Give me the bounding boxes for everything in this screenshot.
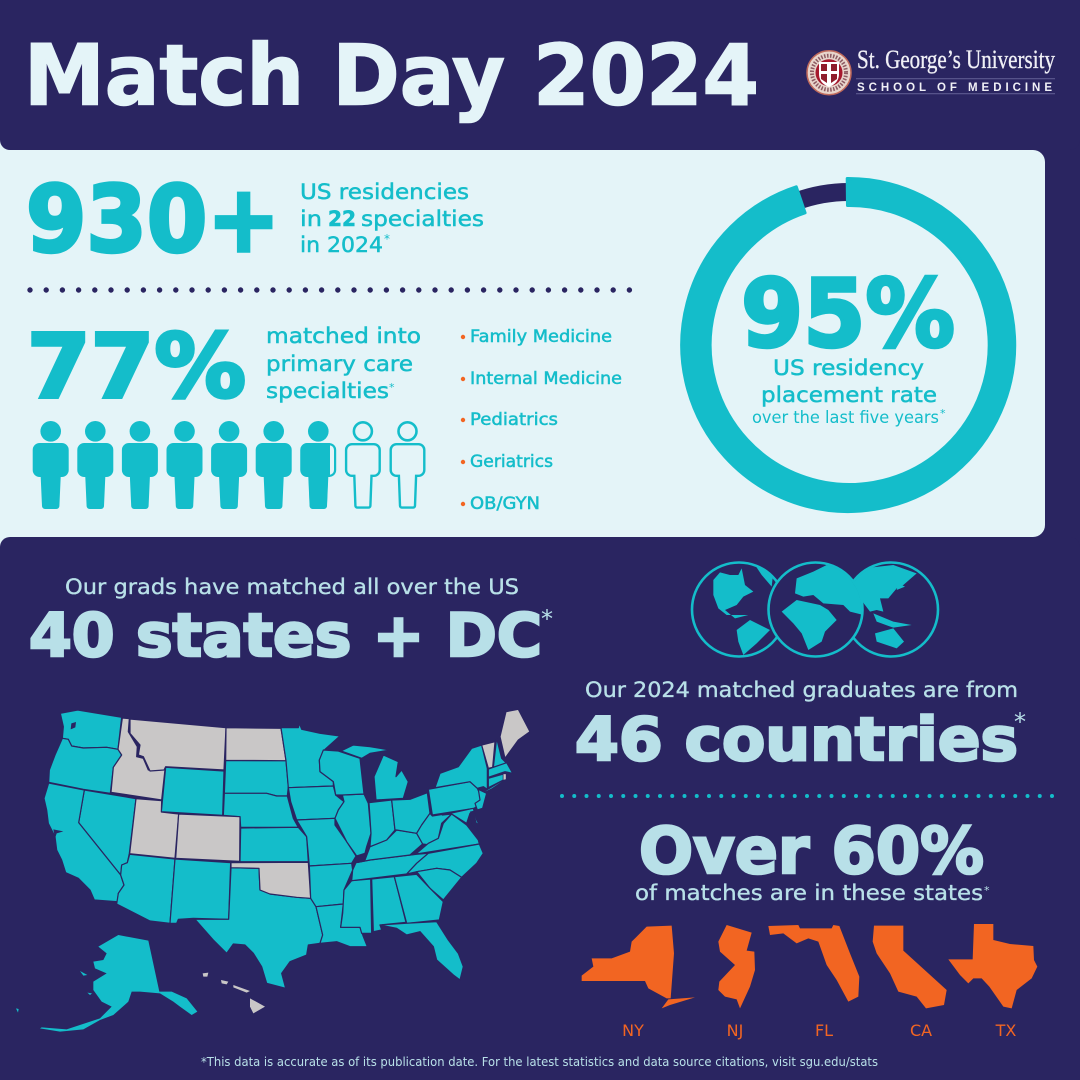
text: grads matched all over the US: Our grads have matched all over the US	[65, 575, 519, 599]
labels: state abbreviations: NY	[622, 1021, 644, 1040]
western states	[44, 710, 323, 988]
list: primary care specialties: Pediatrics	[470, 410, 558, 430]
labels: state abbreviations: CA	[910, 1021, 932, 1040]
heading: Over 60%: Over 60%	[639, 815, 984, 889]
chart: 95% ring	[682, 178, 1015, 511]
state: New Jersey	[718, 925, 755, 1008]
globe: Europe and Africa	[768, 562, 863, 656]
text: 2024 matched graduates: Our 2024 matched graduates are from	[585, 678, 1018, 702]
title: Match Day 2024	[24, 26, 759, 124]
labels: state abbreviations: FL	[815, 1021, 833, 1040]
text: US residency placement rate: *	[940, 407, 946, 420]
logo seal	[807, 51, 851, 95]
stat: 930+: 930+	[26, 166, 280, 273]
puget sound	[71, 722, 76, 729]
text: US residencies: *	[384, 232, 390, 246]
header band	[0, 0, 1080, 150]
text: US residencies	[300, 180, 484, 258]
matched states	[281, 723, 513, 980]
asterisk: *	[984, 884, 990, 897]
labels: state abbreviations	[622, 1021, 1016, 1040]
list: primary care specialties: Geriatrics	[470, 452, 553, 472]
text: matched into primary care specialties: matched into	[266, 324, 421, 349]
heading: 40 states + DC: 40 states + DC	[29, 601, 542, 671]
logo subline: SCHOOL OF MEDICINE	[857, 82, 1052, 94]
text: US residencies: in 2024	[300, 233, 383, 258]
western unmatched states	[111, 718, 311, 898]
text: US residencies: 22	[328, 207, 356, 232]
icon: three globes	[692, 562, 938, 656]
logo: St. George's University	[807, 45, 1055, 95]
text: matched into primary care specialties: primary care	[266, 352, 413, 377]
globe: Americas	[692, 562, 786, 656]
list: primary care specialties	[461, 327, 622, 514]
bay area	[53, 829, 63, 838]
icons: top five states	[582, 924, 1037, 1008]
chesapeake bay	[470, 811, 478, 832]
text: matched into primary care specialties	[266, 324, 421, 404]
map: central and eastern states	[281, 709, 530, 980]
list: primary care specialties: OB/GYN	[470, 494, 540, 514]
asterisk: *	[541, 605, 553, 633]
alaska	[16, 935, 197, 1032]
panel: stats background	[0, 138, 1045, 550]
asterisk: *	[1014, 708, 1026, 736]
text: US residency placement rate: US residency	[773, 356, 924, 381]
logo rule bottom	[856, 93, 1055, 94]
text: of matches are in these states: of matches are in these states	[635, 881, 983, 905]
text: US residency placement rate	[752, 356, 946, 427]
text: US residency placement rate: over the last five years	[752, 408, 939, 427]
text: matched into primary care specialties: *	[389, 381, 395, 394]
map: United States	[16, 710, 323, 1032]
hawaii	[203, 973, 265, 1013]
pictogram: people 7 of 9	[33, 421, 424, 509]
state: New York	[582, 926, 695, 1008]
logo rule top	[856, 78, 1055, 79]
text: matched into primary care specialties: specialties	[266, 379, 389, 404]
lower band	[0, 537, 1080, 1080]
stat: 95%: 95%	[741, 260, 955, 369]
globe: Asia Pacific	[844, 562, 938, 656]
list: primary care specialties: Internal Medicine	[470, 369, 622, 389]
unmatched states	[482, 709, 530, 780]
text: US residencies: in	[300, 207, 322, 232]
text: US residencies: US residencies	[300, 180, 469, 205]
heading: 46 countries: 46 countries	[575, 705, 1018, 775]
labels: state abbreviations: TX	[995, 1021, 1016, 1040]
state: California	[873, 926, 947, 1008]
list: primary care specialties: Family Medicine	[470, 327, 612, 347]
footnote: *This data is accurate as of its publication date. For the latest statistics and data source citations, visit sgu.edu/stats	[201, 1055, 878, 1069]
labels: state abbreviations: NJ	[727, 1021, 743, 1040]
stat: 77%: 77%	[27, 315, 246, 418]
state: Florida	[768, 925, 859, 1002]
text: US residency placement rate: placement rate	[761, 383, 937, 408]
state: Texas	[948, 924, 1037, 1008]
text: US residencies: specialties	[361, 207, 484, 232]
